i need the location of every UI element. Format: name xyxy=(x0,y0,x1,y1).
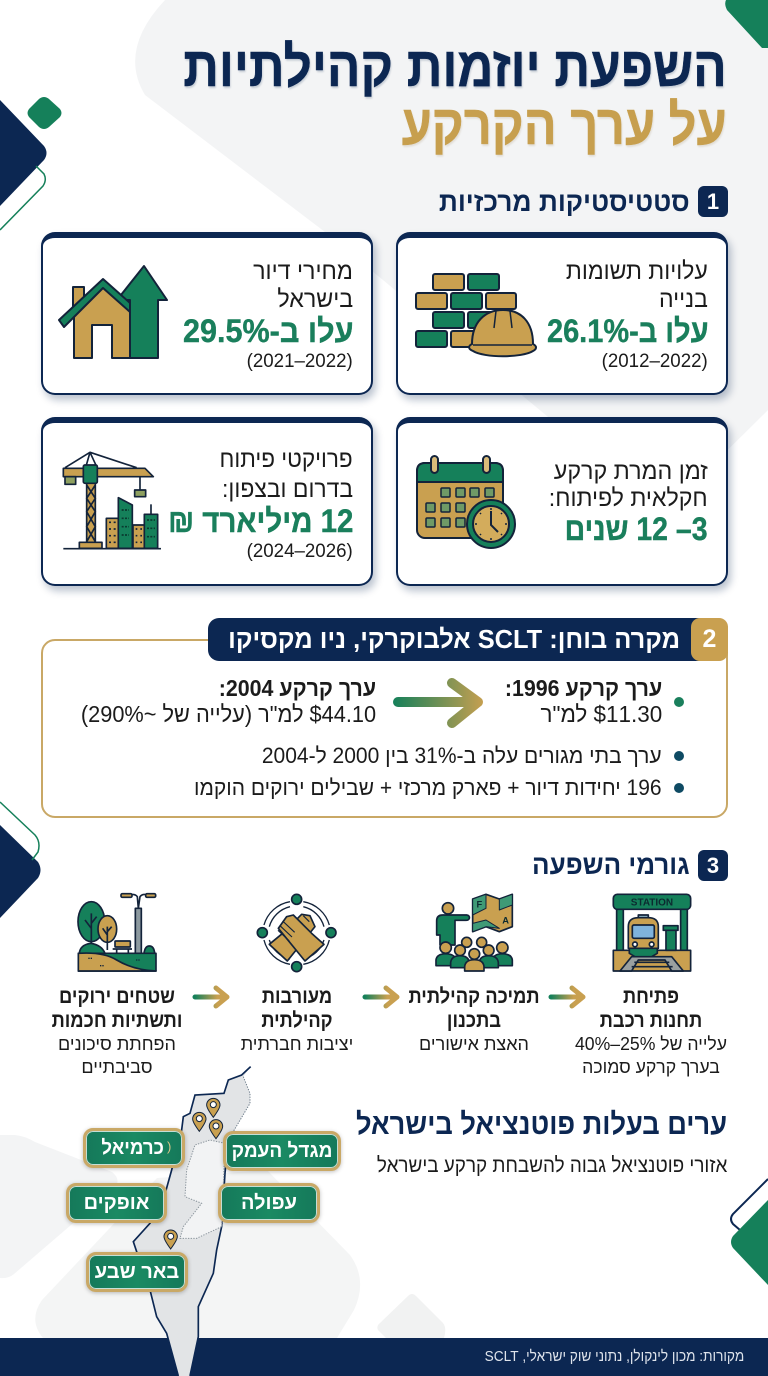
factor note: האצת אישורים xyxy=(419,1034,529,1054)
badge 1: 1 xyxy=(707,189,719,214)
factor title: ותשתיות חכמות xyxy=(52,1009,182,1032)
gold number badge: 2 xyxy=(703,625,716,653)
panel: construction costs: (2012–2022) xyxy=(602,351,708,372)
panel: housing prices: עלו ב-29.5% xyxy=(183,313,353,349)
section 1 heading xyxy=(439,186,728,217)
factor title: פתיחת xyxy=(623,985,679,1008)
city tag: Migdal HaEmek xyxy=(223,1131,341,1171)
bullet: housing units: 196 יחידות דיור + פארק מרכזי + שבילים ירוקים הוקמו xyxy=(195,775,662,800)
value amount: $11.30 למ"ר xyxy=(540,701,662,727)
city tag: Afula: עפולה xyxy=(241,1192,297,1214)
cities heading: ערים בעלות פוטנציאל בישראל xyxy=(356,1108,727,1141)
factor note: סביבתיים xyxy=(81,1057,153,1077)
factor title: מעורבות xyxy=(262,985,332,1008)
panel: development projects: 12 מיליארד ₪ xyxy=(168,503,353,539)
card text: מחירי דיור xyxy=(253,258,353,285)
panel: housing prices: (2021–2022) xyxy=(247,351,353,372)
factor title xyxy=(600,985,702,1032)
factor note xyxy=(58,1034,176,1077)
case study frame xyxy=(41,639,728,818)
factor note xyxy=(575,1034,727,1077)
factor note: יציבות חברתית xyxy=(241,1034,353,1054)
factor: community support xyxy=(408,985,540,1054)
panel: construction costs: בנייה xyxy=(659,286,708,313)
panel: land conversion time xyxy=(396,417,728,586)
bullet dot xyxy=(674,783,684,793)
bullet dot xyxy=(674,751,684,761)
title xyxy=(184,35,727,157)
factor: train stations xyxy=(575,985,727,1077)
factor title xyxy=(408,985,540,1032)
title line 1: השפעת יוזמות קהילתיות xyxy=(184,35,727,98)
panel: land conversion time: חקלאית לפיתוח: xyxy=(549,485,708,512)
panel: development projects xyxy=(41,417,373,586)
factor title: תחנות רכבת xyxy=(600,1009,702,1032)
land value 2004 xyxy=(81,675,376,727)
panel: construction costs xyxy=(396,232,728,395)
cities subtitle: אזורי פוטנציאל גבוה להשבחת קרקע בישראל xyxy=(377,1154,727,1177)
badge 1 xyxy=(698,186,728,217)
city tag: Beer Sheva xyxy=(86,1252,188,1292)
value amount: $44.10 למ"ר (עלייה של ~290%) xyxy=(81,701,376,727)
factor: green spaces xyxy=(52,985,182,1077)
footer bar xyxy=(0,1338,768,1376)
card text: פרויקטי פיתוח xyxy=(220,446,353,473)
card text: זמן המרת קרקע xyxy=(554,458,708,485)
factor title xyxy=(52,985,182,1032)
panel: case study xyxy=(41,618,728,818)
section 3 heading xyxy=(532,850,728,881)
panel: development projects: בדרום ובצפון: xyxy=(222,476,353,503)
factor title: בתכנון xyxy=(447,1009,501,1032)
city tag: Karmiel xyxy=(83,1128,185,1168)
icon: community planning: F xyxy=(476,900,482,910)
factor title: תמיכה קהילתית xyxy=(408,985,540,1008)
bullet dot xyxy=(674,697,684,707)
tag mark: ( xyxy=(167,1139,171,1154)
city tag: Ofakim: אופקים xyxy=(84,1192,149,1214)
tag label: כרמיאל xyxy=(101,1137,164,1159)
sources: מקורות: מכון לינקולן, נתוני שוק ישראלי, SCLT xyxy=(484,1348,744,1365)
badge 3: 3 xyxy=(707,853,719,878)
land value 1996 xyxy=(505,675,662,727)
case study header bar xyxy=(208,618,728,661)
title line 2: על ערך הקרקע xyxy=(402,93,727,156)
panel: development projects: (2024–2026) xyxy=(247,541,353,562)
heading text: סטטיסטיקות מרכזיות xyxy=(439,187,690,217)
factor note: הפחתת סיכונים xyxy=(58,1034,176,1054)
factor note: בערך קרקע סמוכה xyxy=(582,1057,720,1077)
heading text: גורמי השפעה xyxy=(532,850,690,880)
city tag: Beer Sheva: באר שבע xyxy=(95,1261,179,1283)
card text: עלויות תשומות xyxy=(566,258,708,285)
factor: community engagement xyxy=(241,985,353,1054)
icon: community planning: A xyxy=(502,915,509,925)
city tag: Ofakim xyxy=(66,1183,167,1223)
icon: train station: STATION xyxy=(631,898,673,909)
city tag: Migdal HaEmek: מגדל העמק xyxy=(232,1140,332,1162)
factor title xyxy=(261,985,333,1032)
panel: housing prices xyxy=(41,232,373,395)
badge 3 xyxy=(698,850,728,881)
header title: מקרה בוחן: SCLT אלבוקרקי, ניו מקסיקו xyxy=(228,624,680,654)
value label: ערך קרקע 2004: xyxy=(219,675,376,701)
bullet: house values: ערך בתי מגורים עלה ב-31% בין 2000 ל-2004 xyxy=(262,743,662,768)
panel: construction costs: עלו ב-26.1% xyxy=(546,313,708,349)
factor note: עלייה של 25%–40% xyxy=(575,1034,727,1054)
city tag: Afula xyxy=(218,1183,320,1223)
factor title: קהילתית xyxy=(261,1009,333,1032)
panel: housing prices: בישראל xyxy=(277,286,353,313)
panel: land conversion time: 3– 12 שנים xyxy=(565,511,708,547)
value label: ערך קרקע 1996: xyxy=(505,675,662,701)
gold number badge xyxy=(691,618,728,661)
factor title: שטחים ירוקים xyxy=(59,985,175,1008)
